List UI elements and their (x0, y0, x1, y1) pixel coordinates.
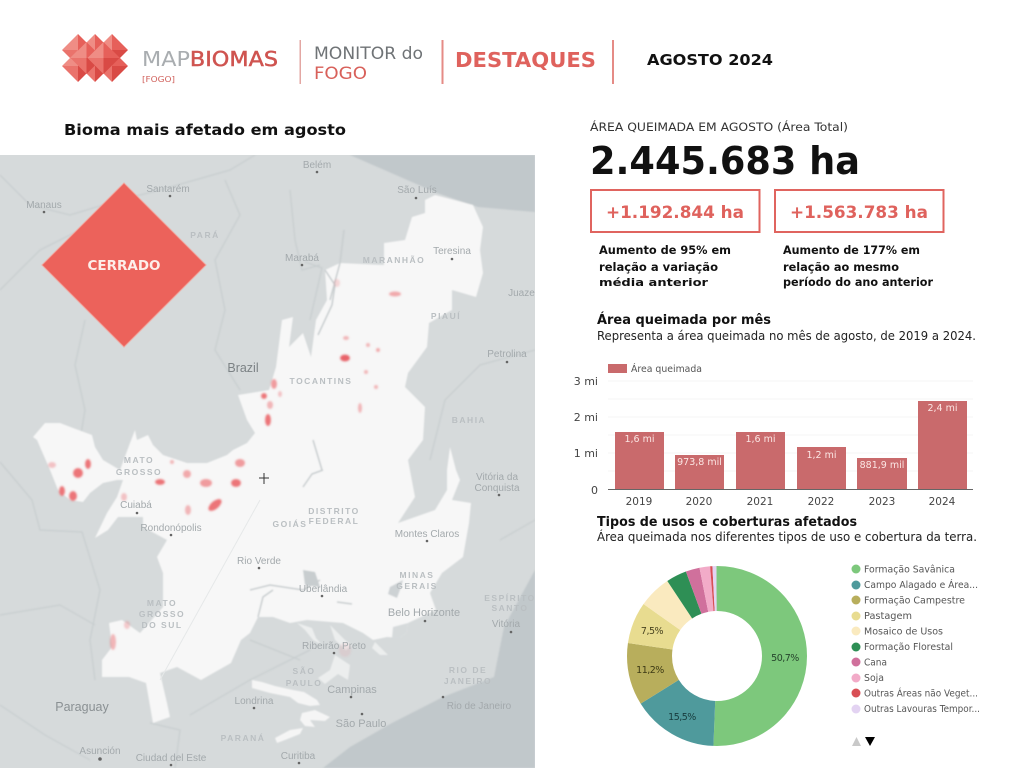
donut legend: Outras Lavouras Tempor... (864, 704, 980, 715)
map labels: Ribeirão Preto (302, 641, 366, 652)
bar chart: burned area: 0 (591, 484, 598, 497)
state labels: GERAIS (396, 581, 438, 591)
logo tag: FOGO: [FOGO] (142, 75, 175, 84)
icon: legend pagination arrows (852, 737, 875, 746)
donut chart: land use: 11,2% (636, 665, 664, 676)
total label: ÁREA QUEIMADA EM AGOSTO (Área Total) (590, 119, 848, 134)
callout: Cerrado diamond (42, 183, 206, 347)
state labels: MINAS (400, 570, 434, 580)
map labels: Ciudad del Este (136, 753, 207, 764)
header (62, 34, 773, 84)
donut chart: land use (636, 588, 799, 724)
map labels: Rio Verde (237, 556, 281, 567)
map labels: Petrolina (487, 349, 527, 360)
map labels: Marabá (285, 253, 319, 264)
map labels: Uberlândia (299, 584, 348, 595)
map labels: Belo Horizonte (388, 607, 460, 619)
donut legend: Mosaico de Usos (864, 626, 943, 638)
stat box: variation vs previous year: +1.563.783 ha (790, 203, 928, 223)
donut legend: Campo Alagado e Área... (864, 579, 978, 591)
chart legend: Área queimada (631, 363, 702, 375)
donut chart: land use: 50,7% (771, 653, 799, 664)
stat text: 95% increase: média anterior (599, 276, 709, 289)
map labels: Londrina (235, 696, 274, 707)
stat text: 177% increase (783, 243, 933, 289)
map labels: Rondonópolis (140, 523, 202, 534)
heading: Agosto 2024: AGOSTO 2024 (647, 51, 773, 69)
heading: land use types (597, 514, 977, 544)
heading: Destaques: DESTAQUES (455, 48, 596, 72)
heading: land use types: Tipos de usos e coberturas afetados (597, 514, 857, 530)
state labels: GOIÁS (273, 519, 307, 529)
state labels: DO SUL (141, 620, 183, 630)
callout: Cerrado diamond: CERRADO (88, 259, 160, 274)
cerrado area (33, 195, 483, 723)
map labels: Paraguay (55, 700, 110, 714)
bar chart: burned area: 2021 (747, 496, 773, 508)
map labels: Rio de Janeiro (447, 701, 512, 712)
total value: 2.445.683 ha (590, 139, 860, 183)
bar chart: burned area: 1,6 mi (624, 434, 655, 445)
state labels: GROSSO (139, 609, 185, 619)
bar chart: burned area: 2019 (626, 496, 652, 508)
state labels: MATO (147, 598, 177, 608)
donut legend: Cana (864, 658, 887, 668)
donut chart: land use: 15,5% (668, 712, 696, 723)
donut chart: land use: 7,5% (641, 626, 664, 637)
state labels: ESPÍRITO (484, 593, 536, 603)
stat text: 177% increase: Aumento de 177% em (783, 243, 920, 257)
chart legend (608, 363, 702, 375)
state labels: JANEIRO (444, 676, 492, 686)
map labels: Montes Claros (395, 529, 459, 540)
map labels: Vitória da (476, 472, 518, 483)
map labels: Juazeiro (508, 288, 546, 299)
bar chart: burned area: 2 mi (574, 411, 598, 424)
bar chart: burned area (574, 363, 973, 508)
map labels: Teresina (433, 246, 471, 257)
map labels (26, 160, 546, 764)
heading: area by month: Representa a área queimada no mês de agosto, de 2019 a 2024. (597, 329, 976, 343)
map labels: Campinas (327, 684, 377, 696)
bar chart: burned area: 973,8 mil (677, 457, 722, 468)
São Paulo fragments (252, 680, 330, 743)
heading: area by month (597, 311, 976, 343)
map: Cerrado (0, 155, 546, 768)
bar chart: burned area: 1 mi (574, 447, 598, 460)
total burned area block (590, 119, 860, 183)
bar chart: burned area: 1,6 mi (745, 434, 776, 445)
stat box: variation vs average (591, 190, 760, 232)
stat text: 95% increase: relação a variação (599, 260, 718, 274)
state labels (116, 230, 536, 743)
state labels: MATO (124, 455, 154, 465)
Monitor do Fogo label: FOGO (314, 64, 367, 83)
map labels: Belém (303, 160, 331, 171)
bar chart: burned area: 2,4 mi (927, 403, 958, 414)
stat box: variation vs average: +1.192.844 ha (606, 203, 744, 223)
stat text: 95% increase: Aumento de 95% em (599, 243, 731, 257)
stat text: 177% increase: relação ao mesmo (783, 260, 899, 274)
heading: land use types: Área queimada nos diferentes tipos de uso e cobertura da terra. (597, 529, 977, 544)
bar chart: burned area: 2020 (686, 496, 712, 508)
map labels: São Paulo (336, 718, 386, 730)
bar chart: burned area: 881,9 mil (860, 460, 904, 471)
state labels: BAHIA (452, 415, 486, 425)
state labels: FEDERAL (309, 516, 359, 526)
stat text: 95% increase (599, 243, 731, 289)
map labels: Cuiabá (120, 500, 152, 511)
icon: MapBiomas logo (62, 34, 128, 82)
state labels: PARÁ (190, 230, 220, 240)
donut legend (852, 564, 980, 715)
stat text: 177% increase: período do ano anterior (783, 275, 933, 289)
state labels: SANTO (491, 603, 529, 613)
bar chart: burned area: 2024 (929, 496, 956, 508)
map labels: Curitiba (281, 751, 316, 762)
donut legend: Soja (864, 673, 884, 684)
fire patches (48, 279, 401, 657)
state labels: PIAUÍ (431, 311, 461, 321)
map labels: Santarém (146, 184, 190, 195)
donut legend: Formação Savânica (864, 564, 955, 576)
state labels: PAULO (286, 678, 322, 688)
rivers and gaps inside the biome (250, 230, 352, 617)
bar chart: burned area: 2023 (869, 496, 895, 508)
map labels: Asunción (79, 746, 121, 757)
state labels: RIO DE (449, 665, 487, 675)
heading: area by month: Área queimada por mês (597, 311, 771, 328)
logo wordmark: MAPBIOMAS: MAPBIOMAS (142, 47, 278, 71)
map labels: Vitória (492, 619, 521, 630)
state labels: GROSSO (116, 467, 162, 477)
map labels: Conquista (474, 483, 520, 494)
donut legend: Formação Florestal (864, 642, 953, 653)
state labels: TOCANTINS (290, 376, 352, 386)
map labels: Brazil (227, 361, 259, 375)
bar chart: burned area: 1,2 mi (806, 450, 837, 461)
donut legend: Outras Áreas não Veget... (864, 688, 978, 700)
map labels: São Luís (397, 185, 437, 196)
state labels: DISTRITO (308, 506, 360, 516)
heading: bioma mais afetado: Bioma mais afetado em agosto (64, 121, 346, 139)
Monitor do Fogo label: MONITOR do (314, 44, 423, 63)
bar chart: burned area: 2022 (808, 496, 834, 508)
state labels: MARANHÃO (363, 255, 425, 265)
Monitor do Fogo label (314, 44, 423, 83)
stat box: variation vs previous year (775, 190, 944, 232)
map labels: Manaus (26, 200, 62, 211)
bar chart: burned area: 3 mi (574, 375, 598, 388)
state labels: PARANÁ (221, 733, 265, 743)
donut legend: Formação Campestre (864, 596, 965, 606)
state labels: SÃO (293, 666, 315, 676)
donut legend: Pastagem (864, 611, 912, 622)
